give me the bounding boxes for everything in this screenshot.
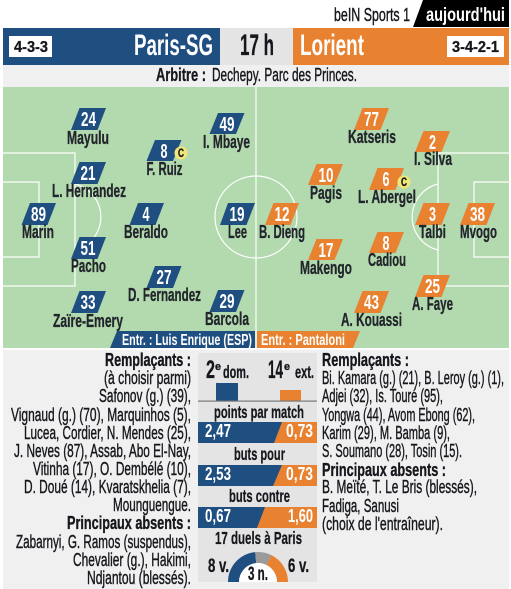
referee and stadium line: Arbitre :: [156, 65, 206, 85]
coach: Luis Enrique: [110, 331, 255, 349]
player: A. Faye: A. Faye: [412, 293, 453, 314]
Paris substitutes and absentees: Safonov (g.) (39),: [99, 386, 191, 406]
Lorient substitutes and absentees: Fadiga, Sanusi: [322, 496, 399, 516]
Paris substitutes and absentees: (à choisir parmi): [104, 368, 191, 388]
player: D. Fernandez: [128, 266, 201, 305]
league rank comparison: 2: [206, 356, 215, 384]
points per match bar: [198, 402, 317, 443]
statistics panel: [198, 353, 317, 585]
match header: Paris-SG: [134, 29, 213, 62]
Paris substitutes and absentees: Mounguengue.: [113, 495, 191, 515]
player: I. Silva: [414, 131, 452, 169]
league rank comparison: ext.: [295, 362, 314, 382]
Paris substitutes and absentees: D. Doué (14), Kvaratskhelia (7),: [24, 477, 191, 497]
points per match bar: 2,47: [205, 420, 231, 441]
player: Katseris: Katseris: [348, 126, 396, 147]
points per match bar: points par match: [214, 402, 304, 422]
player: A. Faye: [412, 275, 453, 314]
player: D. Fernandez: 27: [156, 267, 172, 289]
player: Marin: 89: [31, 204, 46, 226]
player: I. Silva: 2: [429, 132, 436, 154]
Paris substitutes and absentees: Lucea, Cordier, N. Mendes (25),: [24, 423, 191, 443]
Paris substitutes and absentees: Principaux absents :: [67, 513, 191, 533]
league rank comparison: e: [215, 361, 221, 373]
Paris substitutes and absentees: Ndjantou (blessés).: [87, 568, 191, 588]
player: F. Ruiz with captain badge: C: [178, 146, 184, 160]
player: B. Dieng: [259, 203, 305, 242]
Lorient substitutes and absentees: Remplaçants :: [322, 350, 409, 370]
head-to-head half donut: 3 n.: [248, 564, 268, 585]
league rank comparison: 14: [268, 356, 283, 384]
player: Cadiou: Cadiou: [368, 249, 406, 270]
player: L. Abergel with captain badge: L. Abergel: [358, 186, 416, 207]
player: Mvogo: 38: [470, 204, 485, 226]
Paris substitutes and absentees: J. Neves (87), Assab, Abo El-Nay,: [14, 441, 191, 461]
head-to-head half donut: 6 v.: [288, 556, 309, 577]
player: D. Fernandez: D. Fernandez: [128, 284, 201, 305]
league rank comparison: dom.: [223, 362, 249, 382]
player: L. Abergel with captain badge: 6: [382, 169, 390, 191]
player: Beraldo: [124, 203, 168, 242]
player: L. Hernandez: 21: [80, 163, 96, 185]
player: I. Mbaye: 49: [220, 114, 234, 136]
Paris substitutes and absentees: [11, 350, 191, 588]
league rank comparison: e: [284, 361, 290, 373]
player: Mayulu: 24: [81, 109, 97, 131]
match header: 3-4-2-1: [452, 39, 499, 56]
player: Cadiou: [368, 232, 406, 270]
player: Beraldo: 4: [142, 204, 150, 226]
goals conceded bar: [198, 486, 317, 528]
Lorient substitutes and absentees: [322, 350, 504, 534]
player: A. Faye: 25: [425, 276, 440, 298]
player: B. Dieng: 12: [274, 204, 290, 226]
Paris substitutes and absentees: Remplaçants :: [105, 350, 191, 370]
player: A. Kouassi: A. Kouassi: [341, 309, 402, 330]
player: L. Hernandez: L. Hernandez: [52, 180, 126, 201]
player: Makengo: Makengo: [300, 257, 352, 278]
match header: [3, 28, 509, 65]
player: Mayulu: Mayulu: [67, 127, 109, 148]
player: Katseris: 77: [364, 109, 379, 131]
match header: 4-3-3: [14, 39, 48, 56]
goals scored bar: [198, 444, 317, 486]
football pitch: [3, 87, 509, 348]
goals conceded bar: 0,67: [205, 505, 231, 526]
player: Barcola: 29: [220, 291, 234, 313]
player: Talbi: Talbi: [419, 221, 446, 242]
Paris substitutes and absentees: Zabarnyi, G. Ramos (suspendus),: [16, 532, 191, 552]
head-to-head half donut: [208, 528, 309, 585]
broadcaster and date tag: [334, 0, 509, 27]
player: L. Hernandez: [52, 162, 126, 201]
player: Makengo: [300, 239, 352, 278]
coach: Luis Enrique: Entr. : Luis Enrique (ESP): [122, 332, 252, 349]
player: Pagis: [308, 164, 343, 203]
player: Makengo: 17: [318, 240, 334, 262]
Paris substitutes and absentees: Vitinha (17), O. Dembélé (10),: [33, 459, 191, 479]
referee and stadium line: Dechepy. Parc des Princes.: [212, 65, 357, 85]
player: Lee: [220, 203, 255, 242]
broadcaster and date tag: beIN Sports 1: [334, 5, 410, 25]
head-to-head half donut: 8 v.: [208, 556, 229, 577]
player: B. Dieng: B. Dieng: [259, 221, 305, 242]
match header: 17 h: [240, 29, 274, 62]
goals scored bar: buts pour: [234, 444, 285, 464]
player: Zaire-Emery: 33: [80, 292, 96, 314]
goals scored bar: 0,73: [286, 463, 313, 484]
player: Zaire-Emery: [53, 291, 123, 331]
player: Talbi: [415, 203, 450, 242]
player: Pacho: Pacho: [71, 255, 106, 276]
lower panel background: [3, 350, 509, 589]
league rank comparison: [198, 356, 317, 402]
player: Pagis: Pagis: [310, 182, 342, 203]
goals conceded bar: 1,60: [288, 505, 313, 526]
player: Talbi: 3: [429, 204, 436, 226]
Paris substitutes and absentees: Vignaud (g.) (70), Marquinhos (5),: [11, 405, 191, 425]
player: Cadiou: 8: [382, 233, 390, 255]
player: Pacho: [71, 237, 106, 276]
player: Katseris: [348, 108, 396, 147]
Lorient substitutes and absentees: Principaux absents :: [322, 460, 446, 480]
player: Barcola: [205, 290, 249, 329]
player: Pacho: 51: [80, 238, 96, 260]
player: Marin: [22, 203, 56, 242]
player: Pagis: 10: [318, 165, 334, 187]
player: Lee: Lee: [228, 221, 247, 242]
player: Lee: 19: [230, 204, 244, 226]
player: Beraldo: Beraldo: [124, 221, 168, 242]
referee and stadium line: [3, 65, 509, 87]
player: F. Ruiz with captain badge: F. Ruiz: [146, 158, 182, 179]
player: L. Abergel with captain badge: [358, 168, 416, 207]
player: A. Kouassi: [341, 291, 402, 330]
player: Barcola: Barcola: [205, 308, 249, 329]
Lorient substitutes and absentees: (choix de l'entraîneur).: [322, 514, 443, 534]
player: Mvogo: [460, 203, 497, 242]
player: I. Silva: I. Silva: [414, 148, 452, 169]
player: Marin: Marin: [22, 221, 54, 242]
player: F. Ruiz with captain badge: [146, 140, 188, 179]
player: Mayulu: [67, 108, 109, 148]
player: I. Mbaye: [203, 113, 250, 152]
coach: Pantaloni: Entr. : Pantaloni: [261, 332, 345, 349]
goals scored bar: 2,53: [205, 463, 231, 484]
player: I. Mbaye: I. Mbaye: [203, 131, 250, 152]
head-to-head half donut: 17 duels à Paris: [215, 528, 302, 548]
player: A. Kouassi: 43: [364, 292, 379, 314]
points per match bar: 0,73: [286, 420, 313, 441]
Paris substitutes and absentees: Chevalier (g.), Hakimi,: [73, 550, 191, 570]
player: F. Ruiz with captain badge: 8: [160, 141, 168, 163]
player: L. Abergel with captain badge: C: [401, 175, 407, 189]
match header: Lorient: [300, 29, 364, 62]
goals conceded bar: buts contre: [229, 486, 290, 506]
player: Zaire-Emery: Zaïre-Emery: [53, 310, 123, 331]
